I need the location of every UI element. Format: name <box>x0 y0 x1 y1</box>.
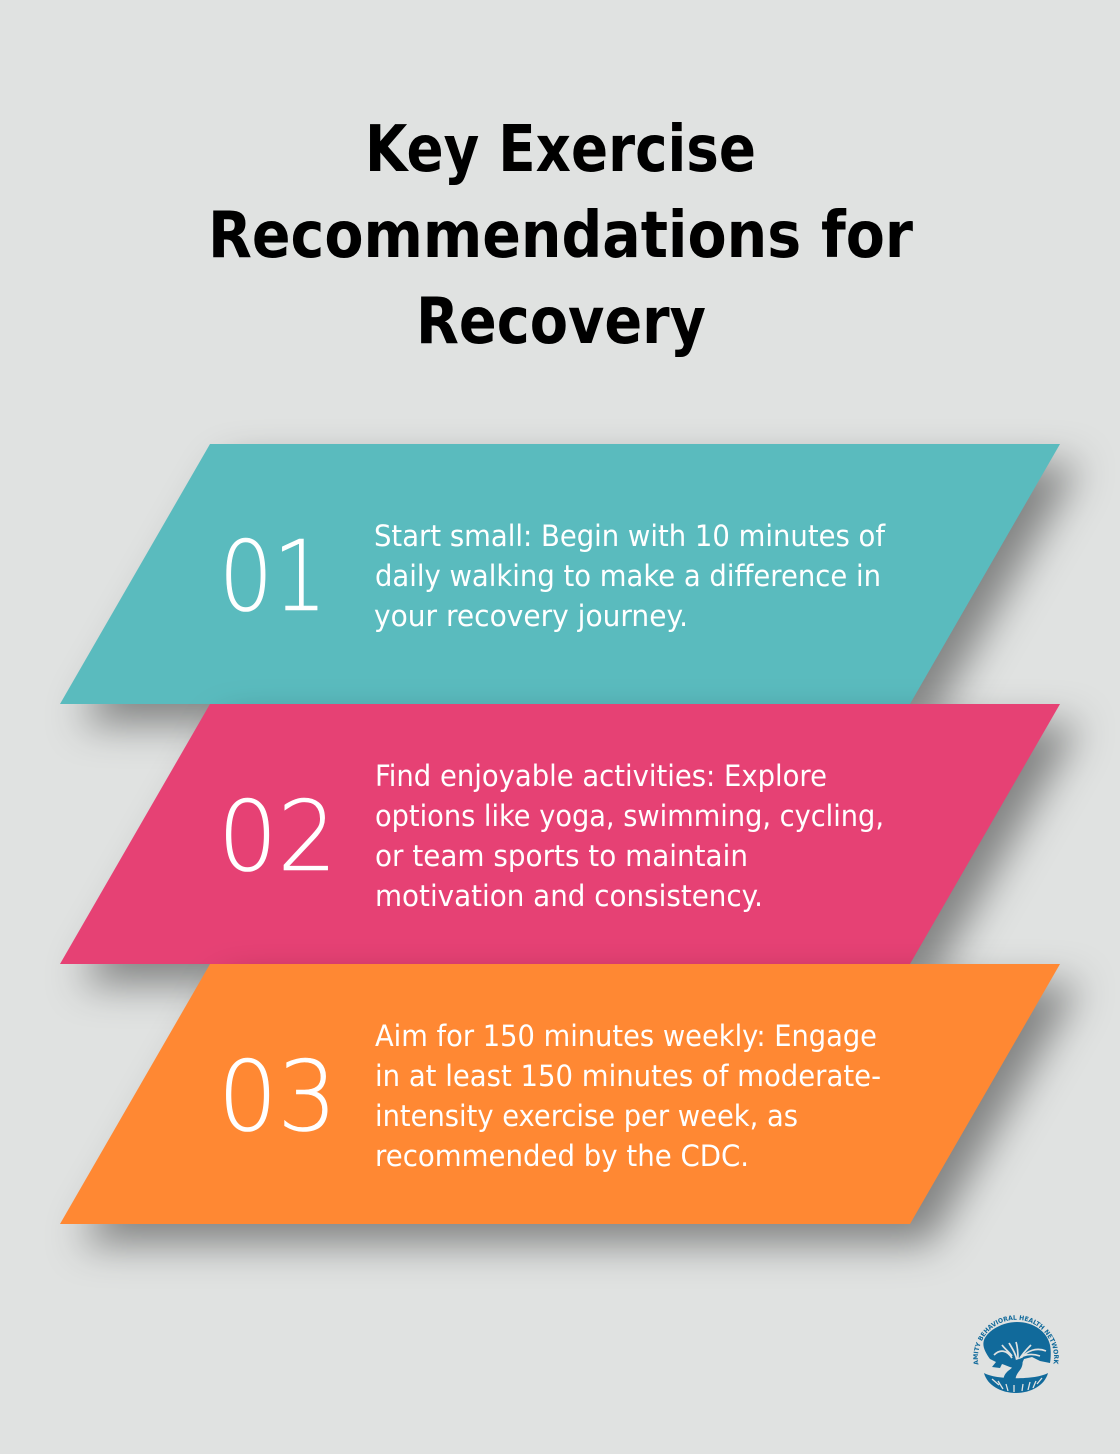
text: step 02 description <box>375 759 884 913</box>
title: Key Exercise <box>365 113 756 187</box>
text: step 02 description: motivation and consistency. <box>375 879 763 913</box>
icon: Amity Behavioral Health Network logo: AMITY BEHAVIORAL HEALTH NETWORK <box>973 1315 1059 1365</box>
tree trunk <box>1004 1358 1023 1384</box>
tree branches <box>994 1342 1046 1361</box>
title <box>208 113 913 359</box>
text: step 03 description: in at least 150 minutes of moderate- <box>375 1059 881 1093</box>
text: step 03 description <box>375 1019 881 1173</box>
roots bowl <box>984 1373 1048 1393</box>
text: step 01 description: daily walking to make a difference in <box>375 559 881 593</box>
tree canopy <box>983 1322 1051 1369</box>
text: step 03 description: recommended by the CDC. <box>375 1139 749 1173</box>
panel shape: teal parallelogram <box>60 444 1060 704</box>
title: Recommendations for <box>208 199 913 273</box>
panel: step 01 <box>60 444 1080 724</box>
title: Recovery <box>416 285 706 359</box>
text: step 03 description: intensity exercise per week, as <box>375 1099 798 1133</box>
number: 01: 01 <box>219 520 327 633</box>
text: step 01 description: Start small: Begin with 10 minutes of <box>374 519 886 553</box>
panel: step 03 <box>60 964 1080 1244</box>
text: step 03 description: Aim for 150 minutes weekly: Engage <box>375 1019 877 1053</box>
text: step 01 description: your recovery journey. <box>374 599 688 633</box>
panel shape: orange parallelogram <box>60 964 1060 1224</box>
panel: step 02 <box>60 704 1080 984</box>
text: step 01 description <box>374 519 886 633</box>
panel shape: pink parallelogram <box>60 704 1060 964</box>
icon: Amity Behavioral Health Network logo <box>973 1315 1059 1393</box>
text: step 02 description: Find enjoyable activities: Explore <box>375 759 827 793</box>
text: step 02 description: or team sports to maintain <box>375 839 748 873</box>
number: 02: 02 <box>218 780 337 893</box>
root highlights <box>992 1378 1042 1392</box>
number: 03: 03 <box>218 1040 337 1153</box>
text: step 02 description: options like yoga, swimming, cycling, <box>375 799 884 833</box>
